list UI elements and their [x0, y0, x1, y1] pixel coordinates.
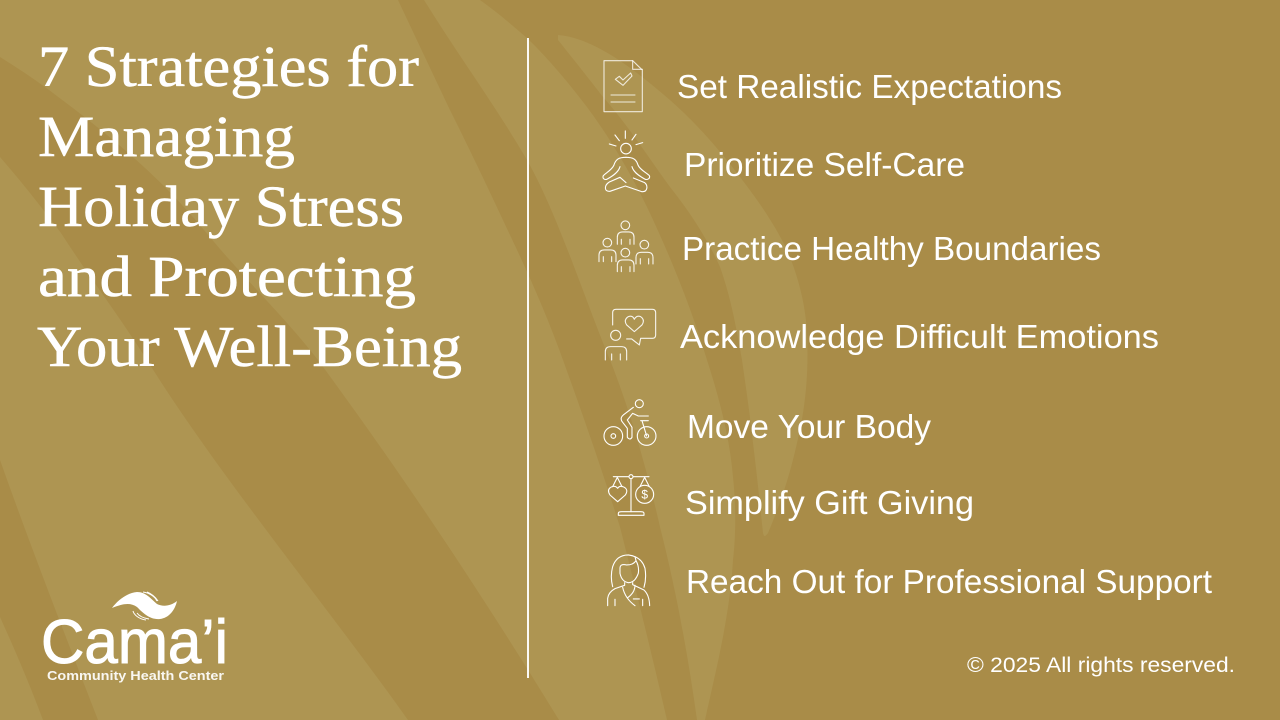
icon: group of people [599, 221, 653, 272]
icon: meditating person [603, 131, 650, 192]
label: Practice Healthy Boundaries [682, 230, 1101, 267]
icon: professional woman [608, 555, 650, 606]
copyright: © 2025 All rights reserved. [967, 653, 1235, 677]
item: set realistic expectations [604, 61, 1062, 112]
logo [41, 592, 228, 683]
title: 7 Strategies for [38, 34, 419, 99]
label: Move Your Body [687, 408, 931, 445]
icon: balance scale with heart and dollar: $ [641, 488, 648, 502]
vertical divider [527, 38, 529, 678]
title: Holiday Stress [38, 174, 404, 239]
title: and Protecting [38, 244, 416, 309]
item: practice healthy boundaries [599, 221, 1101, 272]
item: simplify gift giving [608, 475, 974, 521]
logo mark: swoosh [112, 592, 177, 620]
logo tagline: Community Health Center [47, 668, 224, 683]
icon: person with heart speech bubble [605, 309, 656, 360]
panel: strategies list [599, 61, 1212, 606]
logo wordmark: Cama’i [41, 608, 228, 677]
label: Prioritize Self-Care [684, 146, 965, 183]
label: Simplify Gift Giving [685, 484, 974, 521]
icon: balance scale with heart and dollar [608, 475, 654, 515]
item: move your body [604, 400, 931, 445]
title: Your Well-Being [37, 314, 462, 379]
item: prioritize self-care [603, 131, 965, 192]
label: Set Realistic Expectations [677, 68, 1062, 105]
item: reach out for professional support [608, 555, 1212, 606]
title [37, 34, 462, 379]
icon: cyclist [604, 400, 656, 445]
label: Acknowledge Difficult Emotions [680, 318, 1159, 355]
icon: document with checkmark [604, 61, 642, 112]
item: acknowledge difficult emotions [605, 309, 1159, 360]
title: Managing [38, 104, 295, 169]
label: Reach Out for Professional Support [686, 563, 1212, 600]
